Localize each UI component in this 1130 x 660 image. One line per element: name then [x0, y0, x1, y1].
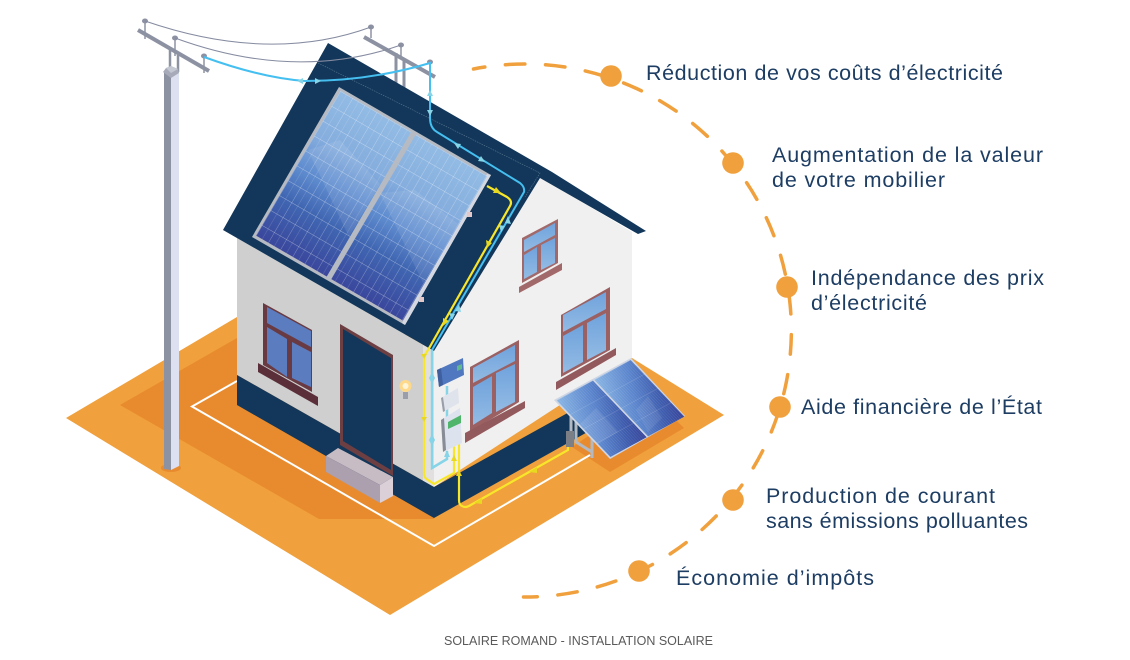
benefit: tax savings — [628, 560, 874, 590]
blue cable — [204, 57, 524, 468]
blue cable arrows — [297, 78, 511, 457]
benefit: price independence: d’électricité — [811, 291, 927, 315]
near utility pole — [138, 18, 209, 472]
house — [223, 43, 646, 518]
window: middle right wall — [556, 287, 616, 390]
footer caption: SOLAIRE ROMAND - INSTALLATION SOLAIRE — [444, 634, 713, 648]
ground plot — [66, 317, 724, 615]
benefit: state aid: Aide financière de l’État — [801, 394, 1042, 419]
overhead wires — [145, 21, 401, 62]
benefit: tax savings: Économie d’impôts — [676, 565, 874, 590]
corner strip — [423, 345, 434, 487]
base left — [237, 375, 434, 518]
benefit: cost reduction: Réduction de vos coûts d’électricité — [646, 61, 1003, 85]
dashed arc — [474, 64, 791, 597]
window: upper right wall — [519, 219, 562, 293]
roof — [223, 43, 646, 351]
main meter — [441, 408, 462, 452]
base right — [434, 395, 600, 518]
junction box — [566, 431, 574, 447]
benefit: property value: de votre mobilier — [772, 168, 945, 192]
yellow cable — [421, 186, 568, 507]
door — [340, 324, 393, 476]
roof solar panels — [252, 87, 491, 325]
benefit: clean power — [722, 484, 1028, 533]
benefit: property value: Augmentation de la valeur — [772, 143, 1043, 167]
window: left wall — [258, 303, 318, 406]
benefit: price independence: Indépendance des prix — [811, 266, 1044, 290]
ground solar panel — [554, 358, 685, 459]
electrical equipment — [437, 358, 464, 452]
icon: light bulb — [400, 380, 412, 399]
benefit: property value — [722, 143, 1043, 192]
roof seam — [318, 63, 540, 197]
inverter — [437, 358, 464, 387]
benefit: clean power: Production de courant — [766, 484, 995, 508]
left wall — [237, 238, 434, 487]
far utility pole crossarm — [364, 24, 435, 90]
yellow cable arrows — [421, 187, 537, 504]
window: lower right wall — [465, 340, 525, 443]
doorstep — [326, 448, 393, 503]
benefit: price independence — [776, 266, 1044, 315]
small meter — [441, 388, 459, 412]
benefit: clean power: sans émissions polluantes — [766, 509, 1028, 533]
right wall — [434, 177, 632, 487]
